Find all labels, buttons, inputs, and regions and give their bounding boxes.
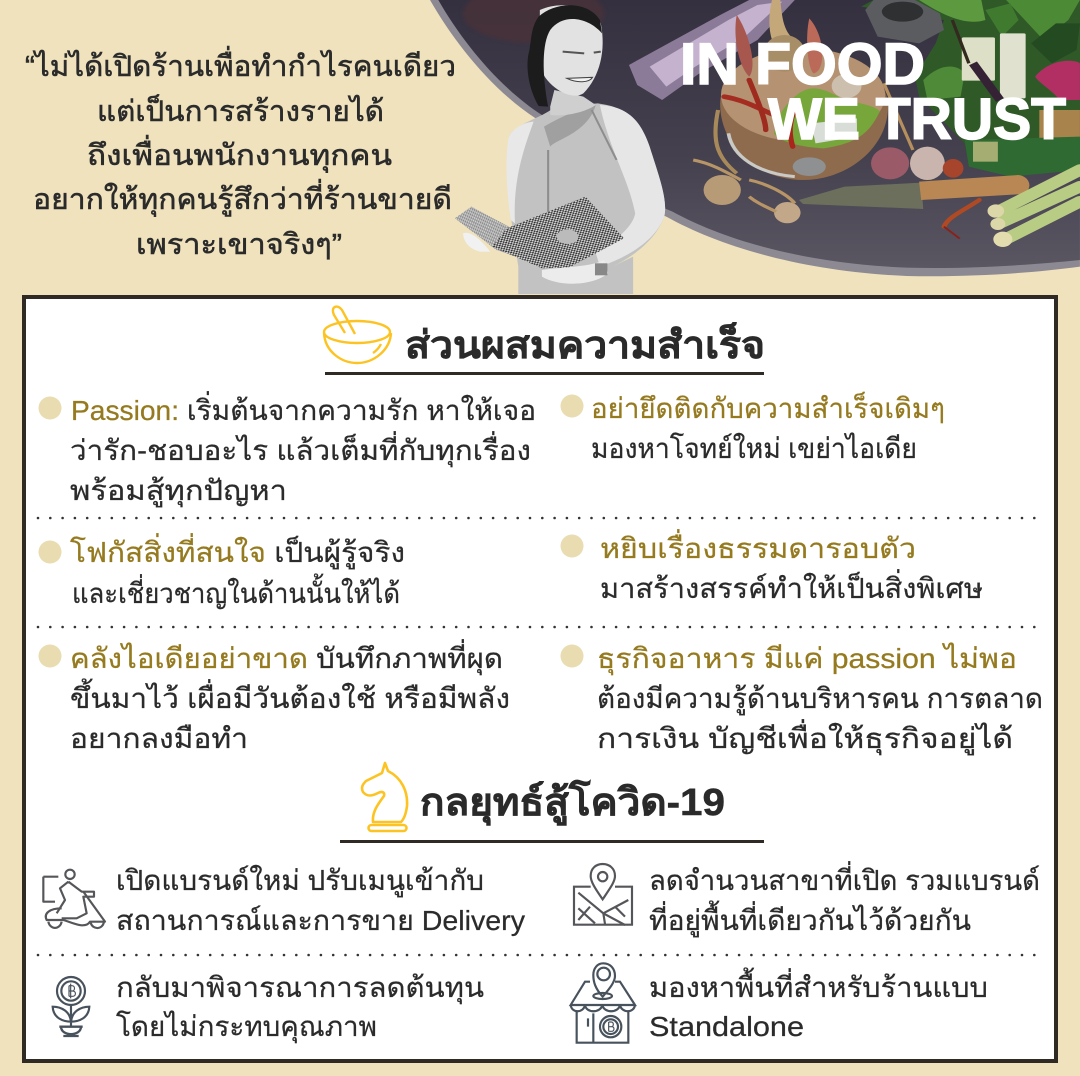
- title: In Food We Trust: WE TRUST: [768, 87, 1066, 152]
- icon: map pin: [574, 864, 632, 925]
- bullet item: do not cling: มองหาโจทย์ใหม่ เขย่าไอเดีย: [591, 432, 917, 464]
- bullet item: do not cling: อย่ายึดติดกับความสำเร็จเดิมๆ: [591, 391, 945, 424]
- text: new brand: สถานการณ์และการขาย Delivery: [116, 905, 525, 936]
- quote: “ไม่ได้เปิดร้านเพื่อทำกำไรคนเดียว: [25, 46, 456, 83]
- bullet item: food business: [560, 643, 1043, 756]
- bullet item: focus: [38, 533, 405, 609]
- text: cost: กลับมาพิจารณาการลดต้นทุน: [116, 972, 484, 1005]
- icon: mortar bowl: [324, 307, 391, 363]
- title: In Food We Trust: [680, 32, 1066, 152]
- text: new brand: [116, 864, 525, 936]
- quote: อยากให้ทุกคนรู้สึกว่าที่ร้านขายดี: [33, 179, 452, 217]
- photo: woman holding menu: [455, 5, 665, 294]
- lemongrass: [998, 170, 1080, 240]
- bullet item: food business: การเงิน บัญชีเพื่อให้ธุรกิจอยู่ได้: [597, 719, 1013, 756]
- text: standalone: มองหาพื้นที่สำหรับร้านแบบ: [649, 967, 988, 1003]
- bullet item: everyday things: หยิบเรื่องธรรมดารอบตัว: [600, 529, 916, 564]
- bullet item: focus: และเชี่ยวชาญในด้านนั้นให้ได้: [72, 573, 400, 609]
- bullet item: idea bank: อยากลงมือทำ: [70, 723, 248, 754]
- quote: ถึงเพื่อนพนักงานทุกคน: [87, 135, 392, 173]
- bullet item: passion: พร้อมสู้ทุกปัญหา: [70, 475, 287, 508]
- text: cost: [116, 972, 484, 1044]
- quote: แต่เป็นการสร้างรายได้: [97, 93, 384, 128]
- bullet item: food business: ต้องมีความรู้ด้านบริหารคน การตลาด: [597, 683, 1043, 716]
- quote: [25, 46, 456, 261]
- bullet item: passion: [38, 391, 536, 508]
- icon: chess knight: [362, 763, 407, 831]
- text: standalone: [649, 967, 988, 1042]
- photo: plate with Thai ingredients: [430, 0, 1080, 276]
- galangal shoots: [735, 15, 753, 77]
- icon: money plant: [53, 977, 89, 1036]
- panel: main: [24, 297, 1056, 1061]
- heading: covid strategy: กลยุทธ์สู้โควิด-19: [420, 779, 725, 826]
- bullet item: idea bank: คลังไอเดียอย่าขาด บันทึกภาพที่ผุด: [70, 639, 503, 676]
- bullet item: everyday things: มาสร้างสรรค์ทำให้เป็นสิ่งพิเศษ: [600, 569, 983, 604]
- text: cost: โดยไม่กระทบคุณภาพ: [116, 1010, 377, 1044]
- chillies: [724, 97, 774, 115]
- bullet item: idea bank: ขึ้นมาไว้ เผื่อมีวันต้องใช้ หรือมีพลัง: [70, 678, 510, 714]
- text: reduce branches: ลดจำนวนสาขาที่เปิด รวมแบรนด์: [649, 861, 1040, 896]
- bullet item: passion: Passion: เริ่มต้นจากความรัก หาให้เจอ: [71, 391, 536, 426]
- garlic: [832, 74, 861, 98]
- bullet item: do not cling: [560, 391, 945, 464]
- board: [720, 48, 888, 180]
- bullet item: idea bank: [38, 639, 510, 754]
- text: reduce branches: ที่อยู่พื้นที่เดียวกันไว้ด้วยกัน: [649, 900, 971, 938]
- bullet item: passion: ว่ารัก-ชอบอะไร แล้วเต็มที่กับทุกเรื่อง: [70, 431, 531, 468]
- icon: delivery scooter: [43, 870, 105, 928]
- menu: [455, 207, 546, 267]
- bullet item: focus: โฟกัสสิ่งที่สนใจ เป็นผู้รู้จริง: [70, 533, 405, 570]
- title: In Food We Trust: IN FOOD: [680, 32, 925, 97]
- heading: success mix: ส่วนผสมความสำเร็จ: [405, 322, 765, 367]
- bullet item: food business: ธุรกิจอาหาร มีแค่ passion ไม่พอ: [597, 643, 1017, 676]
- bullet item: everyday things: [560, 529, 983, 604]
- icon: shop with pin: [571, 963, 635, 1043]
- text: standalone: Standalone: [649, 1011, 804, 1042]
- text: new brand: เปิดแบรนด์ใหม่ ปรับเมนูเข้ากับ: [116, 864, 484, 898]
- knife: [799, 183, 923, 209]
- quote: เพราะเขาจริงๆ”: [136, 229, 342, 261]
- text: reduce branches: [649, 861, 1040, 938]
